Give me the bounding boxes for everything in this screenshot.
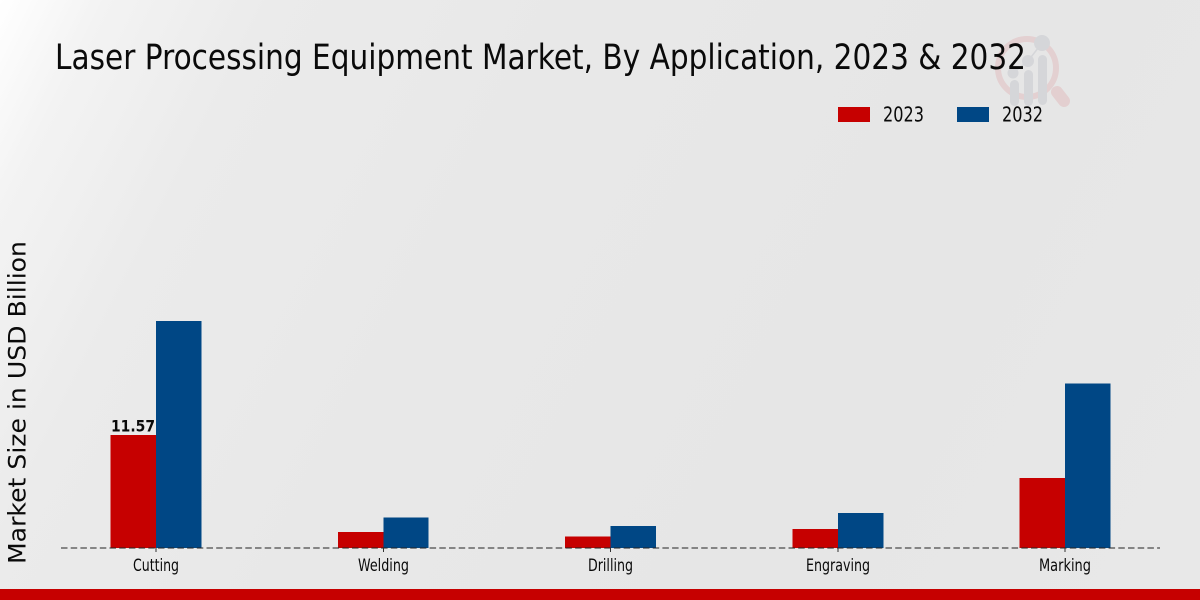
footer bar xyxy=(0,589,1200,600)
y axis label: Market Size in USD Billion xyxy=(4,241,32,564)
category labels: Cutting xyxy=(133,556,179,576)
group: Engraving xyxy=(792,513,884,548)
category labels: Marking xyxy=(1039,556,1091,576)
group: Welding xyxy=(338,518,428,548)
group: Marking xyxy=(1020,384,1110,548)
group: Cutting xyxy=(110,321,202,548)
data label: 11.57 xyxy=(111,416,155,436)
watermark logo xyxy=(998,35,1064,106)
group: Drilling xyxy=(565,526,656,548)
category labels xyxy=(133,556,1091,576)
legend: 2032 xyxy=(1002,102,1043,126)
legend xyxy=(838,102,1043,126)
legend: 2023 xyxy=(883,102,924,126)
bar chart xyxy=(110,321,1110,548)
category labels: Drilling xyxy=(588,556,633,576)
title: Laser Processing Equipment Market, By Application, 2023 & 2032 xyxy=(55,38,1026,78)
category labels: Engraving xyxy=(806,556,870,576)
category labels: Welding xyxy=(358,556,409,576)
